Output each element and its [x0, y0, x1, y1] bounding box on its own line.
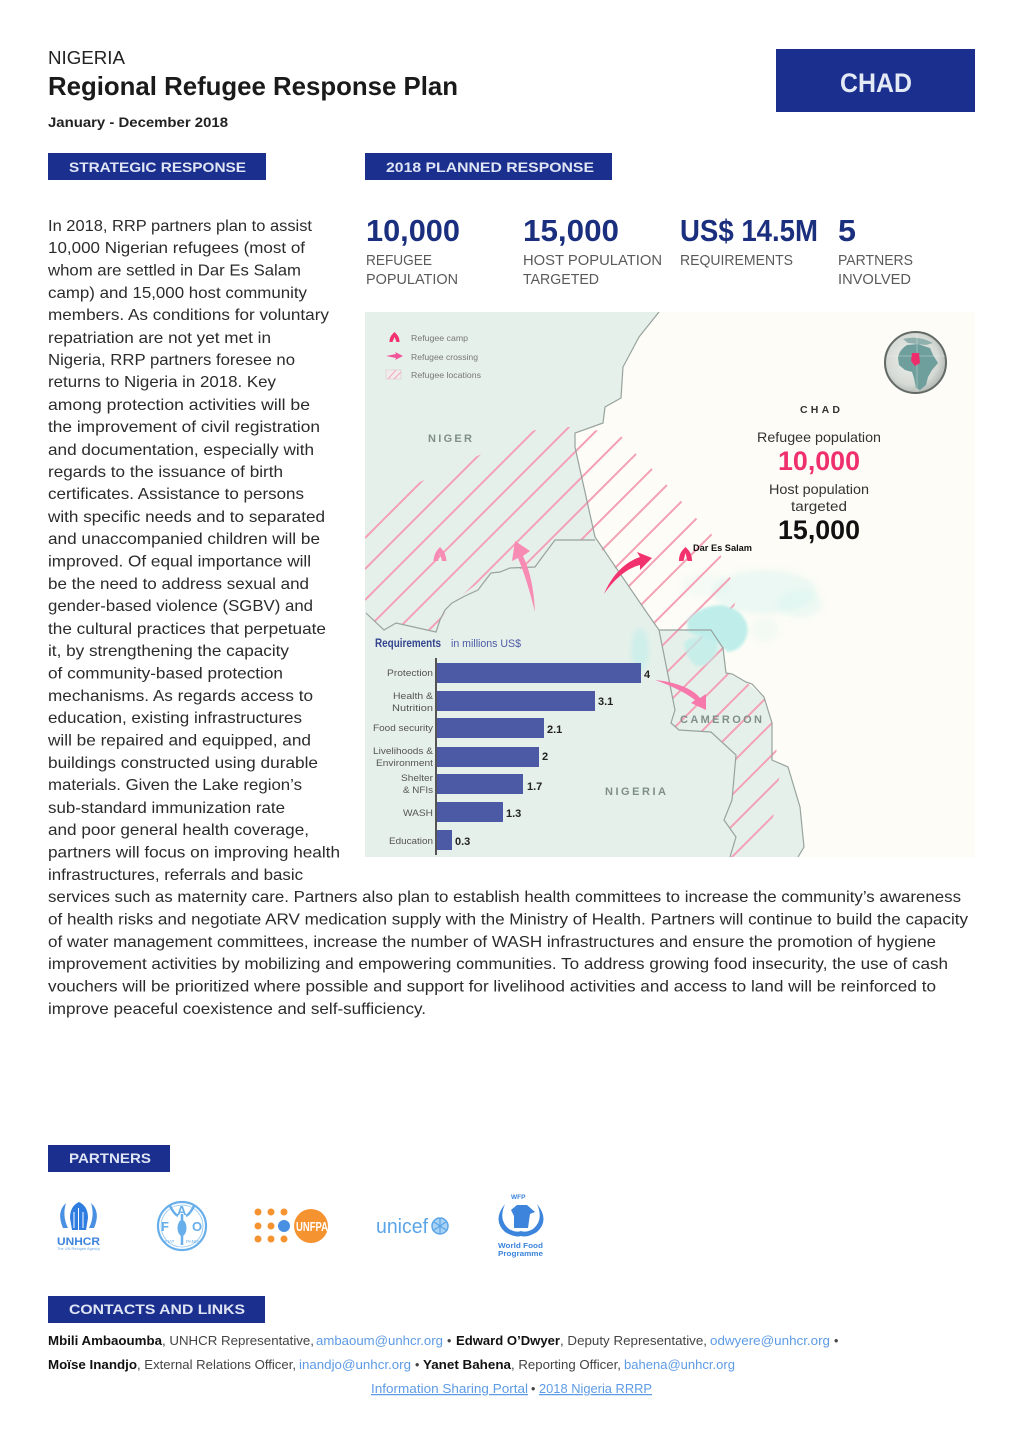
- figure: refugee population: REFUGEE: [366, 252, 432, 269]
- title block: [48, 48, 458, 130]
- chart title: in millions US$: [451, 638, 521, 650]
- figure: host population targeted: 15,000: [523, 213, 619, 248]
- callout: Chad figures: targeted: [791, 498, 847, 514]
- text block: strategic response narrative: camp) and 15,000 host community: [48, 285, 307, 302]
- logo: World Food Programme: Programme: [498, 1249, 543, 1258]
- section heading: 2018 planned response: 2018 PLANNED RESPONSE: [386, 160, 594, 175]
- text block: strategic response narrative: vouchers will be prioritized where possible and support for livelihood activities and access to land will be reinforced to: [48, 978, 936, 996]
- lake: faint marsh speckle: [631, 570, 822, 672]
- contact line 1: , Deputy Representative,: [560, 1334, 707, 1348]
- text block: strategic response narrative: be the need to address sexual and: [48, 576, 309, 593]
- contact line 2: Moïse Inandjo: [48, 1358, 137, 1372]
- title block: Regional Refugee Response Plan: [48, 71, 458, 101]
- text block: strategic response narrative: improve peaceful coexistence and self-sufficiency.: [48, 1001, 426, 1018]
- links: Information Sharing Portal: [371, 1382, 528, 1396]
- figure: partners involved: [838, 213, 913, 288]
- logo: World Food Programme: World Food: [498, 1241, 543, 1250]
- country borders: [366, 312, 804, 857]
- logo: World Food Programme: WFP: [511, 1194, 526, 1201]
- chart category labels: Nutrition: [392, 703, 433, 714]
- logo: UNFPA: [254, 1208, 328, 1243]
- figure: host population targeted: HOST POPULATION: [523, 252, 662, 269]
- section heading: strategic response: STRATEGIC RESPONSE: [69, 160, 246, 175]
- text block: strategic response narrative: buildings constructed using durable: [48, 755, 318, 772]
- text block: strategic response narrative: education, existing infrastructures: [48, 710, 302, 727]
- logo: FAO: A: [177, 1203, 187, 1218]
- chart category labels: & NFIs: [403, 785, 433, 796]
- chart title: Requirements: [375, 638, 441, 650]
- section heading: partners: PARTNERS: [69, 1151, 151, 1166]
- country badge: Chad: CHAD: [840, 68, 912, 98]
- chart title: [375, 638, 521, 650]
- callout: Chad figures: CHAD: [800, 404, 840, 416]
- contact line 2: inandjo@unhcr.org: [299, 1358, 411, 1372]
- callout: Chad figures: Refugee population: [757, 429, 881, 445]
- callout: Chad figures: [757, 404, 881, 545]
- text block: strategic response narrative: of health risks and negotiate ARV medication supply with the Ministry of Health. Partners will continue to build the capacity: [48, 912, 968, 928]
- chart category labels: Environment: [376, 758, 433, 769]
- contact line 1: •: [834, 1334, 838, 1348]
- Lake Chad open water: [684, 605, 748, 666]
- text block: strategic response narrative: the cultural practices that perpetuate: [48, 621, 326, 638]
- legend: refugee locations: Refugee locations: [411, 370, 481, 380]
- contact line 1: Mbili Ambaoumba: [48, 1334, 163, 1348]
- text block: strategic response narrative: repatriation are not yet met in: [48, 330, 271, 347]
- bar chart: requirements by sector: [373, 638, 651, 855]
- land: Niger, Nigeria and Cameroon: [365, 312, 804, 857]
- contacts: [48, 1334, 838, 1396]
- figure: refugee population: 10,000: [366, 213, 460, 248]
- callout: Chad figures: 15,000: [778, 515, 860, 545]
- section heading: partners: [48, 1145, 170, 1172]
- contact line 1: Edward O’Dwyer: [456, 1334, 560, 1348]
- contact line 2: , Reporting Officer,: [511, 1358, 621, 1372]
- icon: refugee camp in Niger: [434, 547, 446, 561]
- chart category labels: Health &: [393, 691, 434, 702]
- figure: partners involved: PARTNERS: [838, 252, 913, 269]
- text block: strategic response narrative: mechanisms. As regards access to: [48, 688, 313, 705]
- contact line 1: •: [447, 1334, 451, 1348]
- logo: UNHCR: UNHCR: [57, 1236, 100, 1248]
- figure: requirements: US$ 14.5M: [680, 213, 818, 248]
- chart category labels: Shelter: [401, 773, 433, 784]
- text block: strategic response narrative: will be repaired and equipped, and: [47, 732, 311, 750]
- chart bars: [437, 663, 641, 850]
- text block: strategic response narrative: 10,000 Nigerian refugees (most of: [48, 240, 306, 257]
- chart category labels: Livelihoods &: [373, 746, 434, 757]
- chart category labels: Education: [389, 836, 433, 847]
- text block: strategic response narrative: In 2018, RRP partners plan to assist: [48, 218, 313, 235]
- logo: UNHCR: The UN Refugee Agency: [57, 1246, 100, 1251]
- legend: refugee camp: Refugee camp: [411, 333, 468, 343]
- chart values: 4: [644, 669, 651, 681]
- chart values: [455, 669, 651, 848]
- contact line 1: odwyere@unhcr.org: [710, 1334, 830, 1348]
- logo: FAO: O: [192, 1219, 202, 1234]
- logo: UNHCR: [57, 1202, 100, 1251]
- figure: partners involved: 5: [838, 213, 856, 248]
- section heading: contacts and links: [48, 1296, 265, 1323]
- text block: strategic response narrative: of water management committees, increase the number of WASH infrastructures and ensure the promotion of hygiene: [48, 934, 936, 951]
- contact line 2: •: [415, 1358, 419, 1372]
- text block: strategic response narrative: whom are settled in Dar Es Salam: [47, 262, 301, 280]
- chart values: 2.1: [547, 724, 562, 736]
- text block: strategic response narrative: gender-based violence (SGBV) and: [48, 598, 313, 615]
- label: Nigeria: NIGERIA: [605, 786, 666, 798]
- chart category labels: Protection: [387, 668, 433, 679]
- icon: refugee camp Dar Es Salam: [679, 547, 692, 561]
- title block: NIGERIA: [48, 48, 125, 68]
- label: Dar Es Salam: Dar Es Salam: [693, 543, 752, 554]
- figure: host population targeted: [523, 213, 662, 288]
- text block: strategic response narrative: and unaccompanied children will be: [48, 531, 320, 548]
- text block: strategic response narrative: infrastructures, referrals and basic: [48, 867, 303, 884]
- contact line 2: , External Relations Officer,: [137, 1358, 296, 1372]
- text block: strategic response narrative: returns to Nigeria in 2018. Key: [48, 374, 276, 391]
- callout: Chad figures: 10,000: [778, 446, 860, 476]
- contact line 1: , UNHCR Representative,: [162, 1334, 314, 1348]
- contact line 2: Yanet Bahena: [423, 1358, 512, 1372]
- text block: strategic response narrative: improvement activities by mobilizing and empowering communities. To address growing food insecurity, the use of cash: [48, 956, 948, 973]
- figure: refugee population: POPULATION: [366, 271, 458, 288]
- label: Cameroon: CAMEROON: [680, 714, 762, 726]
- logo: FAO: F: [161, 1219, 169, 1234]
- text block: strategic response narrative: regards to the issuance of birth: [48, 464, 283, 481]
- text block: strategic response narrative: it, by strengthening the capacity: [48, 643, 289, 660]
- label: Niger: NIGER: [428, 433, 472, 445]
- chart values: 1.7: [527, 781, 542, 793]
- section heading: strategic response: [48, 153, 266, 180]
- text block: strategic response narrative: among protection activities will be: [48, 397, 310, 414]
- text block: strategic response narrative: and documentation, especially with: [48, 442, 314, 459]
- chart values: 1.3: [506, 808, 521, 820]
- chart category labels: Food security: [373, 723, 433, 734]
- logo: UNICEF: unicef: [376, 1216, 428, 1238]
- links: 2018 Nigeria RRRP: [539, 1382, 652, 1396]
- figure: host population targeted: TARGETED: [523, 271, 599, 288]
- globe locator: [885, 332, 946, 393]
- arrow: crossing into Niger: [512, 541, 535, 612]
- text block: strategic response narrative: materials. Given the Lake region’s: [48, 777, 302, 794]
- logo: FAO: [158, 1202, 206, 1250]
- text block: strategic response narrative: Nigeria, RRP partners foresee no: [48, 352, 295, 369]
- text block: strategic response narrative: certificates. Assistance to persons: [48, 486, 304, 503]
- callout: Chad figures: Host population: [769, 481, 869, 497]
- map background: Chad: [365, 312, 975, 857]
- figure: requirements: REQUIREMENTS: [680, 252, 793, 269]
- section heading: 2018 planned response: [365, 153, 612, 180]
- legend: refugee crossing: Refugee crossing: [411, 352, 478, 362]
- text block: strategic response narrative: with specific needs and to separated: [47, 509, 325, 526]
- contact line 1: ambaoum@unhcr.org: [316, 1334, 443, 1348]
- title block: January - December 2018: [48, 114, 228, 130]
- text block: strategic response narrative: [47, 218, 968, 1018]
- contact line 2: bahena@unhcr.org: [624, 1358, 735, 1372]
- chart values: 0.3: [455, 836, 470, 848]
- contact line 1: [48, 1334, 838, 1348]
- refugee locations hatching: [365, 427, 780, 857]
- arrow: crossing into Chad: [604, 552, 652, 594]
- logo: UNFPA: UNFPA: [296, 1219, 328, 1234]
- country badge: Chad: [776, 49, 975, 112]
- figure: requirements: [680, 213, 818, 269]
- map legend: [386, 332, 481, 380]
- logo: FAO: FIAT: [165, 1239, 175, 1244]
- text block: strategic response narrative: and poor general health coverage,: [48, 822, 309, 839]
- section heading: contacts and links: CONTACTS AND LINKS: [69, 1302, 245, 1317]
- text block: strategic response narrative: partners will focus on improving health: [48, 844, 340, 862]
- arrow: crossing into Cameroon: [655, 680, 706, 710]
- links: •: [531, 1382, 535, 1396]
- chart category labels: WASH: [403, 808, 433, 819]
- chart values: 3.1: [598, 696, 613, 708]
- figure: partners involved: INVOLVED: [838, 271, 911, 288]
- logo: FAO: PANIS: [186, 1239, 199, 1244]
- text block: strategic response narrative: sub-standard immunization rate: [48, 800, 285, 817]
- contact line 2: [48, 1358, 735, 1372]
- key figures: [366, 213, 913, 288]
- text block: strategic response narrative: services such as maternity care. Partners also plan to establish health committees to increase the community’s awareness: [48, 889, 961, 906]
- chart values: 2: [542, 751, 548, 763]
- text block: strategic response narrative: members. As conditions for voluntary: [48, 307, 329, 324]
- text block: strategic response narrative: improved. Of equal importance will: [48, 554, 311, 570]
- links: [371, 1382, 652, 1396]
- figure: refugee population: [366, 213, 460, 288]
- logo: World Food Programme: [498, 1194, 544, 1258]
- map panel: [365, 312, 975, 857]
- text block: strategic response narrative: of community-based protection: [48, 666, 283, 682]
- partner logos: [57, 1194, 544, 1258]
- chart category labels: [373, 668, 434, 847]
- text block: strategic response narrative: the improvement of civil registration: [48, 419, 320, 436]
